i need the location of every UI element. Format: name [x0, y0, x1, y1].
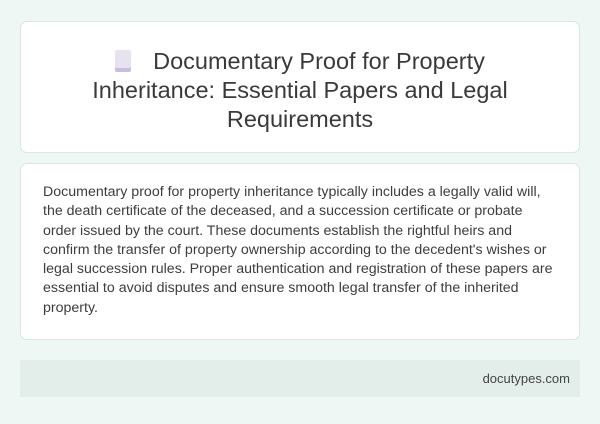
text block: Documentary proof for property inheritance typically includes a legally valid will,: [43, 184, 541, 200]
panel: description: [20, 163, 580, 340]
text block: essential to avoid disputes and ensure smooth legal transfer of the inherited: [43, 280, 519, 296]
text block: confirm the transfer of property ownership according to the decedent's wishes or: [43, 242, 546, 258]
title: Documentary Proof for Property: [153, 48, 485, 74]
title: Requirements: [227, 106, 373, 132]
title: [92, 48, 508, 132]
text block: the death certificate of the deceased, and a succession certificate or probate: [43, 203, 523, 219]
footer text: docutypes.com: [483, 371, 570, 386]
text block: legal succession rules. Proper authentication and registration of these papers are: [43, 261, 552, 277]
icon: document scroll: [115, 50, 131, 72]
text block: property.: [43, 300, 98, 316]
text block: order issued by the court. These documents establish the rightful heirs and: [43, 223, 512, 239]
panel: title card: [20, 21, 580, 153]
footer: [20, 360, 580, 397]
title: Inheritance: Essential Papers and Legal: [92, 77, 508, 103]
text block: [43, 184, 552, 316]
